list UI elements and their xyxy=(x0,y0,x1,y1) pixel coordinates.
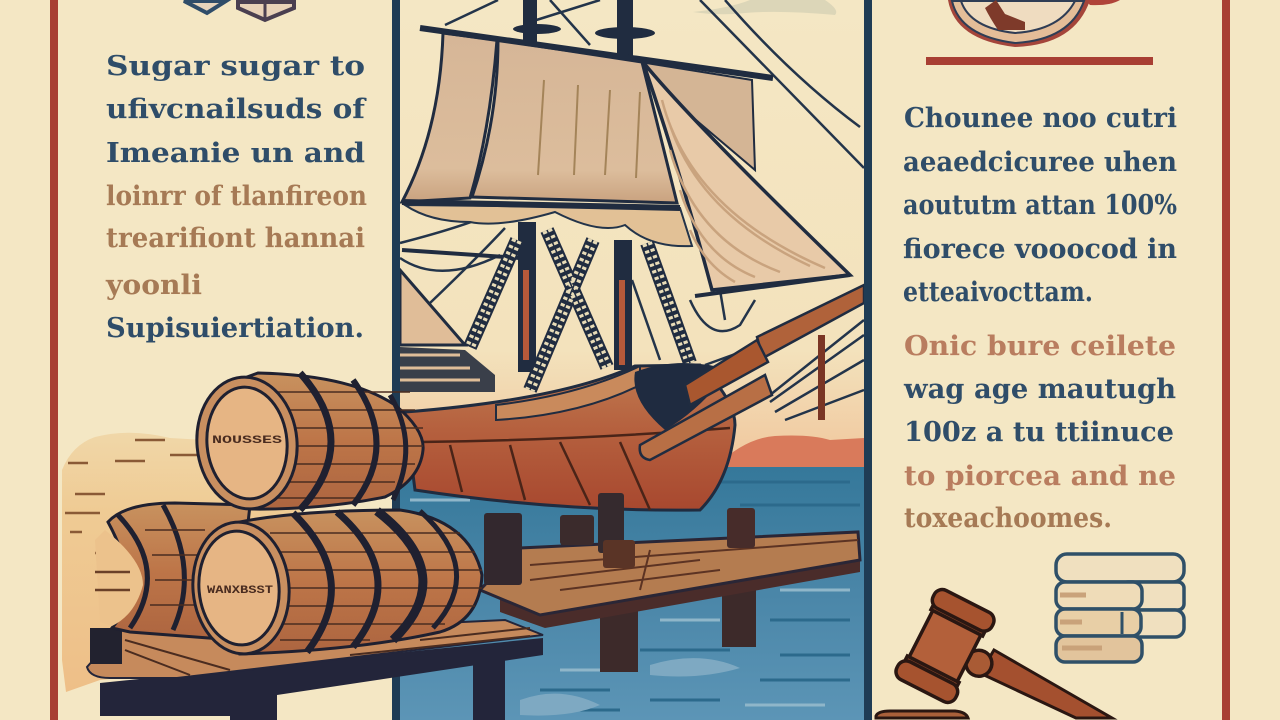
text block: right column: aoututm attan 100% xyxy=(903,190,1177,221)
text block: right column: etteaivocttam. xyxy=(903,277,1093,308)
rope ladders xyxy=(470,230,690,390)
sail: right back xyxy=(640,62,755,170)
panel: ship scene xyxy=(392,0,872,720)
sand foreground xyxy=(62,433,300,692)
text block: right column: aeaedcicuree uhen xyxy=(903,147,1177,178)
text block: left column xyxy=(105,51,368,344)
panel: right border xyxy=(1222,0,1230,720)
panel: left border xyxy=(50,0,58,720)
text block: right column: Onic bure ceilete xyxy=(904,331,1176,362)
text block: right column: 100z a tu ttiinuce xyxy=(904,417,1174,448)
text block: right column: fiorece vooocod in xyxy=(903,234,1177,265)
text block: left column: Imeanie un and xyxy=(106,138,365,169)
hull wale xyxy=(420,428,730,510)
bowsprit middle xyxy=(685,340,768,405)
text block: right column: Chounee noo cutri xyxy=(904,103,1177,134)
jib stripes xyxy=(662,100,825,282)
bowsprit upper xyxy=(757,285,864,358)
barrel label: WANXBSST xyxy=(207,585,273,597)
barrel face xyxy=(187,518,295,658)
sail: furled lower xyxy=(405,205,692,246)
icon: gavel head xyxy=(893,586,1013,714)
sand brush marks xyxy=(65,440,200,553)
icon: plate xyxy=(948,0,1120,47)
text block: right column xyxy=(903,103,1177,534)
hull deck rail xyxy=(496,366,640,420)
hull xyxy=(405,365,735,510)
text block: left column: ufivcnailsuds of xyxy=(106,94,368,125)
water xyxy=(400,467,864,720)
icon: stacked coins xyxy=(1056,554,1184,662)
barrel face xyxy=(191,373,303,513)
text block: left column: Sugar sugar to xyxy=(106,51,365,82)
bow shadow xyxy=(634,363,730,430)
sail: main xyxy=(472,40,677,203)
panel side rule right xyxy=(864,0,872,720)
right dock xyxy=(480,493,860,672)
masts xyxy=(513,0,655,372)
bowsprit rope xyxy=(818,335,825,420)
icon: gavel block xyxy=(876,711,968,718)
text block: left column: yoonli xyxy=(105,270,202,301)
left dock xyxy=(87,620,543,720)
cloud xyxy=(693,0,836,15)
text block: right column: to piorcea and ne xyxy=(904,461,1176,492)
icon: sugar cubes xyxy=(184,1,294,20)
sky xyxy=(400,0,864,500)
text block: right column: wag age mautugh xyxy=(903,374,1176,405)
sail: triangular jib xyxy=(643,62,850,290)
lower left sail xyxy=(400,270,465,345)
text block: left column: Supisuiertiation. xyxy=(106,313,364,344)
bowsprit lower xyxy=(640,375,772,460)
icon: gavel handle xyxy=(982,650,1112,718)
divider: red rule xyxy=(926,57,1153,65)
barrel: left back xyxy=(95,503,250,640)
panel side rule left xyxy=(392,0,400,720)
ship deck house xyxy=(400,347,495,392)
text block: left column: trearifiont hannai xyxy=(106,223,365,254)
text block: left column: loinrr of tlanfireon xyxy=(106,181,367,212)
sail creases xyxy=(538,80,640,178)
distant hills xyxy=(715,436,864,468)
yards xyxy=(402,28,850,296)
sail: far left xyxy=(402,33,497,202)
barrel: bottom front xyxy=(187,510,482,658)
barrel: top xyxy=(191,373,423,513)
text block: right column: toxeachoomes. xyxy=(904,503,1112,534)
barrel label: NOUSSES xyxy=(212,435,283,447)
rigging lines xyxy=(400,0,864,420)
